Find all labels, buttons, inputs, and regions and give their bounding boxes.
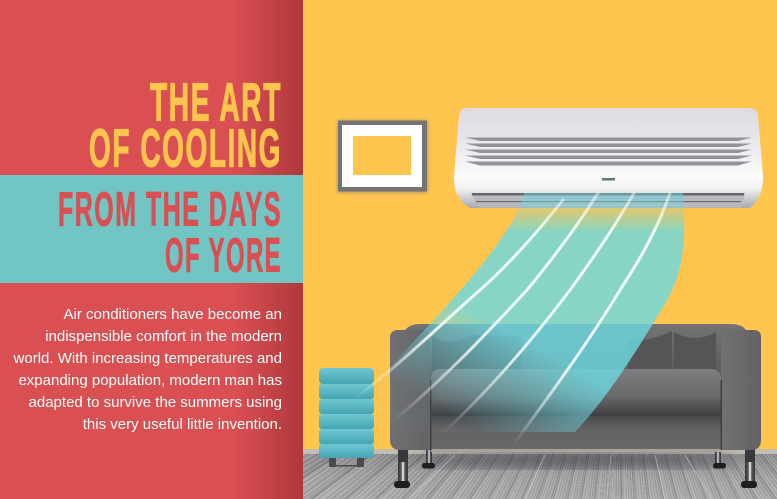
full scene illustration: OF YORE (165, 228, 282, 282)
intro paragraph: Air conditioners have become an (64, 306, 282, 323)
subtitle (58, 182, 282, 282)
sofa legs (394, 448, 757, 488)
sofa right arm (721, 330, 761, 450)
intro paragraph: this very useful little invention. (83, 416, 282, 433)
sofa left arm (390, 330, 430, 450)
title (89, 72, 282, 178)
heater (319, 368, 374, 467)
teal band (0, 175, 303, 283)
cold air streak lines (353, 193, 670, 445)
intro paragraph: world. With increasing temperatures and (14, 350, 282, 367)
sofa cushions (432, 331, 716, 372)
intro paragraph: indispensible comfort in the modern (45, 328, 282, 345)
sofa seat (431, 369, 721, 419)
intro paragraph: expanding population, modern man has (18, 372, 282, 389)
air conditioner (454, 108, 763, 208)
AC outlet (471, 193, 745, 208)
intro paragraph: adapted to survive the summers using (29, 394, 282, 411)
intro paragraph (14, 306, 282, 433)
air flow (345, 193, 684, 445)
AC indicator light (602, 178, 615, 180)
sofa back (405, 324, 746, 430)
title: OF COOLING (89, 118, 282, 178)
title: THE ART (150, 72, 282, 132)
sofa (390, 324, 761, 488)
red panel (0, 0, 303, 499)
picture frame (338, 120, 427, 192)
skirting and floor shadow (303, 449, 777, 499)
wall (303, 0, 777, 453)
sofa base (431, 416, 721, 450)
AC vents (465, 138, 752, 166)
floor (303, 453, 777, 499)
subtitle: FROM THE DAYS (58, 182, 282, 236)
panel shadow (235, 0, 303, 499)
